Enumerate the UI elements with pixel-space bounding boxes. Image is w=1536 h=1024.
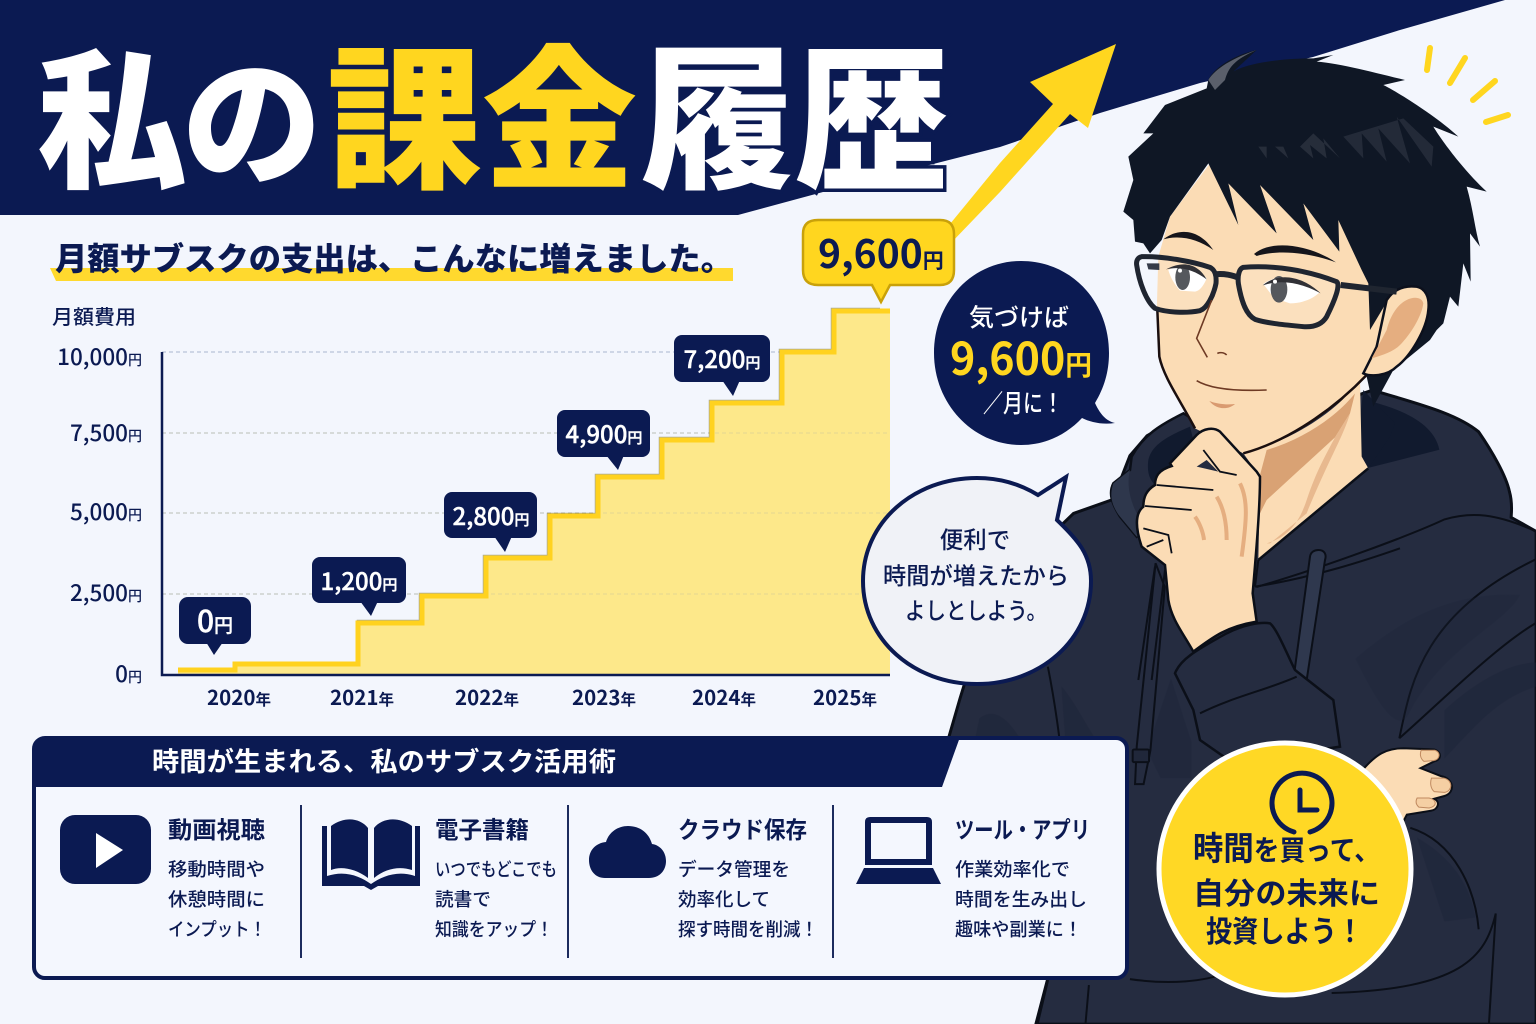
white speech bubble: よしとしよう。	[905, 592, 1047, 626]
value tag: 1200 yen	[312, 557, 406, 616]
x axis labels: 2022年	[455, 681, 519, 711]
title: 私	[37, 3, 187, 220]
value tag: 2800 yen: 2,800円	[453, 497, 529, 532]
x axis labels: 2024年	[692, 681, 756, 711]
icon: laptop	[856, 817, 941, 884]
x axis labels: 2020年	[207, 681, 271, 711]
eyes	[1168, 267, 1207, 292]
x axis labels: 2021年	[330, 681, 394, 711]
y axis labels: 10,000円	[57, 340, 142, 372]
gridlines	[162, 352, 890, 594]
white speech bubble: 便利で	[940, 521, 1010, 555]
eyebrows	[1163, 232, 1336, 262]
hoodie shading	[966, 595, 1536, 921]
head	[1123, 50, 1487, 453]
icon: play button	[60, 815, 151, 884]
y axis labels	[57, 340, 142, 689]
hood lining	[1362, 400, 1439, 468]
item: video	[60, 811, 266, 942]
item: cloud: 探す時間を削減！	[678, 916, 818, 942]
callout text: 投資しよう！	[1206, 907, 1363, 951]
yellow callout circle	[1159, 743, 1411, 995]
ear	[1363, 286, 1429, 375]
item: cloud: 効率化して	[678, 886, 770, 912]
chart	[52, 220, 954, 711]
value tag: 1200 yen: 1,200円	[321, 562, 397, 597]
y axis labels: 0円	[115, 657, 142, 689]
title: 課金	[327, 0, 637, 221]
value tag: 9600 yen	[803, 220, 954, 302]
navy speech bubble: ／月に！	[983, 384, 1063, 420]
item: cloud: データ管理を	[678, 856, 790, 882]
item: tools: 時間を生み出し	[955, 886, 1087, 912]
y axis labels: 7,500円	[70, 416, 142, 448]
title: の	[182, 13, 322, 215]
item: ebooks: 読書で	[435, 886, 491, 912]
rising arrow	[950, 44, 1116, 244]
title: 履歴	[641, 0, 949, 221]
icon: clock	[1272, 773, 1332, 832]
header banner	[0, 0, 1505, 215]
right drawstring	[1293, 550, 1326, 680]
y axis labels: 2,500円	[70, 576, 142, 608]
hair	[1123, 50, 1487, 407]
value tag: 2800 yen	[444, 492, 537, 552]
callout text: 自分の未来に	[1193, 869, 1380, 913]
item: ebooks: 知識をアップ！	[435, 916, 553, 942]
neck and hood front	[1111, 380, 1400, 680]
value tag: 7200 yen: 7,200円	[684, 340, 760, 375]
item: ebooks: いつでもどこでも	[435, 856, 557, 882]
y axis labels: 5,000円	[70, 495, 142, 527]
white speech bubble	[863, 477, 1091, 684]
panel heading: 時間が生まれる、私のサブスク活用術	[152, 740, 616, 779]
item: tools: 趣味や副業に！	[955, 916, 1082, 942]
panel header	[34, 737, 960, 787]
value tag: 4900 yen: 4,900円	[566, 415, 642, 450]
panel: subscription uses	[34, 737, 1127, 978]
item: tools: 作業効率化で	[955, 856, 1070, 882]
item: video: 動画視聴	[168, 811, 266, 845]
x axis labels	[207, 681, 877, 711]
folded hand	[1362, 748, 1452, 828]
item: cloud	[589, 811, 818, 942]
item: tools	[856, 811, 1090, 942]
value tag: 4900 yen	[557, 410, 650, 470]
left drawstring	[1135, 563, 1165, 784]
value tag: 0 yen	[179, 597, 251, 655]
icon: cloud	[589, 826, 666, 878]
item: ebooks: 電子書籍	[435, 811, 529, 845]
value tag: 9600 yen: 9,600円	[818, 224, 944, 280]
person illustration	[935, 50, 1536, 1024]
thinking hand and cuff	[1137, 429, 1340, 763]
nose and mouth	[1197, 300, 1267, 390]
navy speech bubble: 9,600円	[950, 323, 1092, 388]
item: cloud: クラウド保存	[678, 811, 807, 845]
callout text	[1193, 822, 1380, 951]
value tag: 7200 yen	[674, 335, 770, 396]
y axis title: 月額費用	[52, 301, 136, 330]
subtitle with underline: 月額サブスクの支出は、こんなに増えました。	[55, 234, 733, 280]
item: video: 移動時間や	[168, 856, 265, 882]
hood left	[1111, 413, 1200, 537]
item: video: 休憩時間に	[168, 886, 265, 912]
item: video: インプット！	[168, 916, 266, 942]
value tag: 0 yen: 0円	[197, 597, 233, 641]
x axis labels: 2023年	[572, 681, 636, 711]
hoodie body	[935, 390, 1536, 1024]
step line	[178, 309, 890, 670]
axes	[162, 352, 890, 675]
neck	[1243, 380, 1368, 560]
right hood lining	[1357, 390, 1395, 468]
x axis labels: 2025年	[813, 681, 877, 711]
callout text: 時間を買って、	[1193, 822, 1380, 870]
navy speech bubble: 気づけば	[969, 299, 1069, 334]
item: ebooks	[322, 811, 557, 942]
white speech bubble: 時間が増えたから	[883, 557, 1069, 591]
navy speech bubble	[934, 261, 1115, 445]
title	[37, 0, 949, 221]
area fill	[178, 311, 890, 675]
icon: open book	[322, 819, 420, 890]
item: tools: ツール・アプリ	[955, 811, 1090, 845]
glasses	[1137, 257, 1338, 327]
emphasis rays	[1427, 48, 1508, 122]
